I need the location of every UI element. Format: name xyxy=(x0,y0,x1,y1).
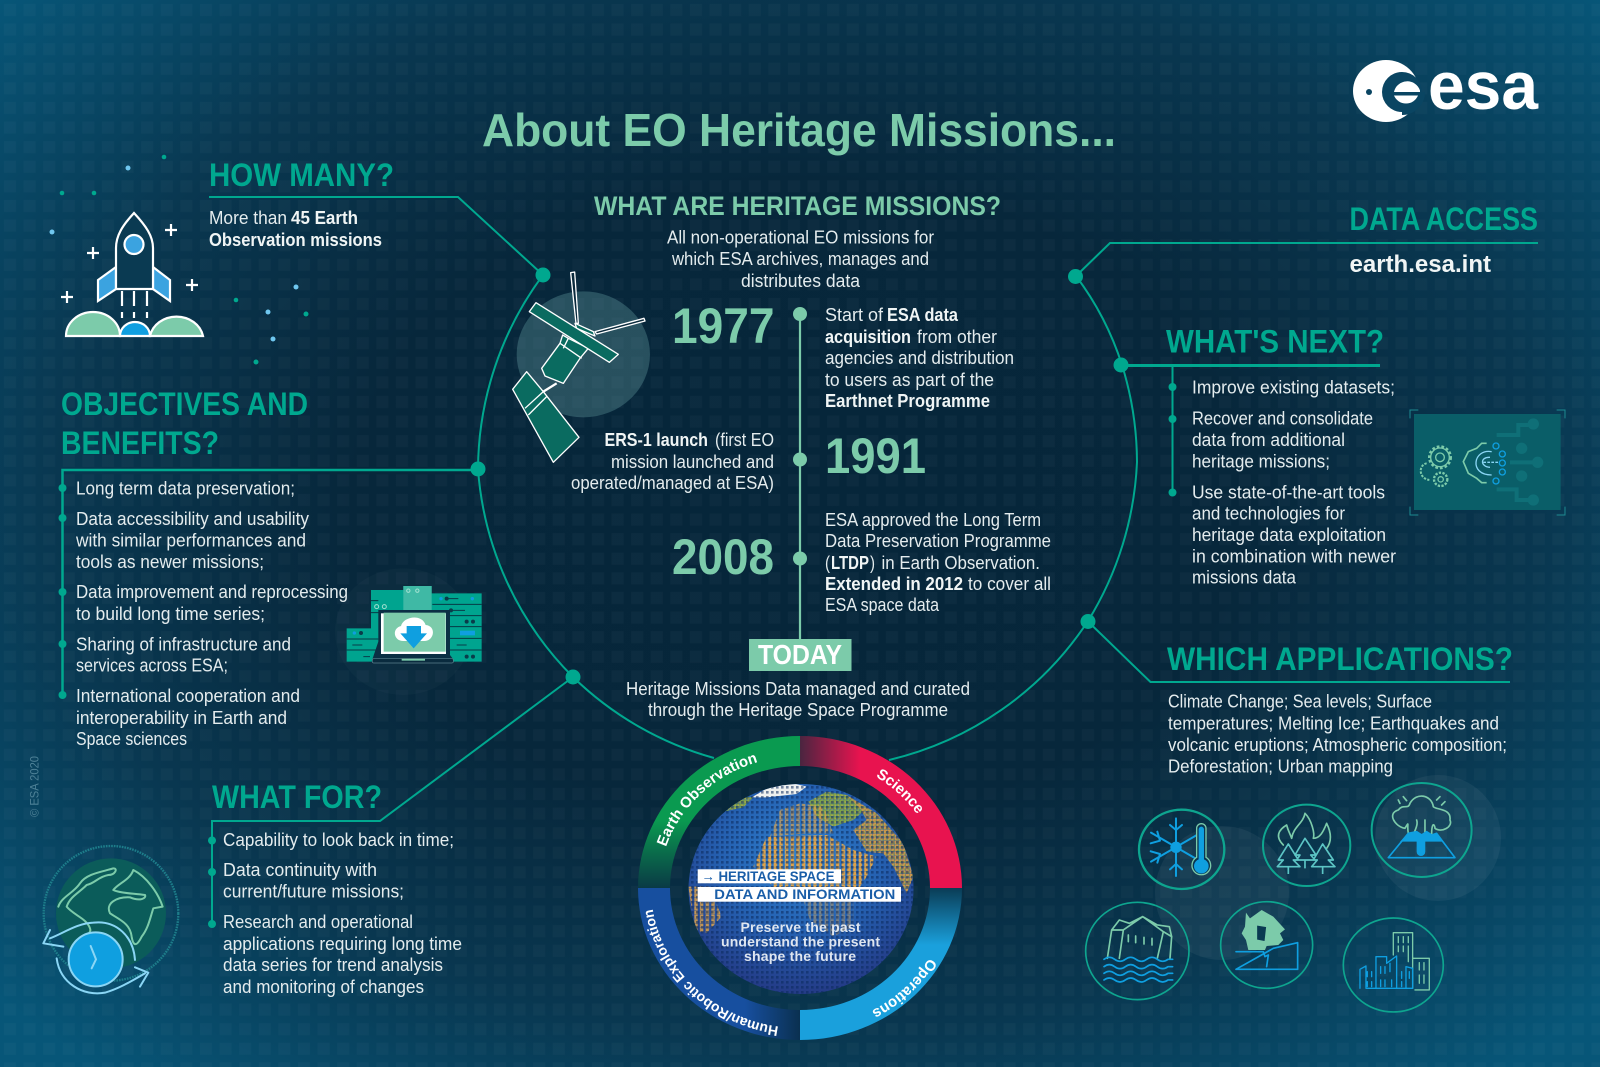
esa logo: esa xyxy=(1428,48,1539,124)
text: 1991 event: ESA approved the Long Term xyxy=(825,510,1041,530)
heading: what for: WHAT FOR? xyxy=(212,779,382,815)
text: what for list: Data continuity with xyxy=(223,860,377,880)
text: definition: which ESA archives, manages and xyxy=(671,249,929,269)
text: applications: temperatures; Melting Ice; Earthquakes and xyxy=(1168,714,1499,734)
timeline nodes xyxy=(793,307,807,566)
label: science: Science xyxy=(877,769,922,813)
icon: servers and laptop xyxy=(335,568,482,695)
icon: earthquake xyxy=(1221,902,1313,988)
text: what for list: current/future missions; xyxy=(223,882,404,902)
text: objectives list: with similar performances and xyxy=(75,530,306,550)
year: 1991: 1991 xyxy=(825,428,926,484)
text: applications: Climate Change; Sea levels; Surface xyxy=(1168,692,1432,712)
text: what for list: applications requiring long time xyxy=(223,934,462,954)
connector: objectives xyxy=(62,470,478,695)
text: 1991 event: in Earth Observation. xyxy=(882,553,1040,573)
bullets: what for xyxy=(208,836,216,928)
panel: which applications xyxy=(1080,614,1513,776)
connector: which applications xyxy=(1088,622,1510,682)
icon: ERS-1 satellite xyxy=(513,272,650,462)
text: what for list: Capability to look back in time; xyxy=(223,830,454,850)
text: how many xyxy=(209,208,382,250)
text: objectives list: services across ESA; xyxy=(76,656,228,676)
text: preserve understand shape xyxy=(721,919,880,964)
heading: objectives xyxy=(61,386,308,461)
node: how many xyxy=(536,268,550,282)
text: objectives list: interoperability in Earth and xyxy=(76,708,287,728)
label: earth observation: Earth Observation xyxy=(656,755,758,846)
heading: how many: HOW MANY? xyxy=(209,157,394,193)
icon: flood xyxy=(1086,902,1189,1000)
segment: human robotic exploration xyxy=(638,888,800,1040)
text: objectives list: Sharing of infrastructure and xyxy=(76,634,291,654)
text: preserve understand shape: shape the future xyxy=(744,948,856,964)
text: what's next list: and technologies for xyxy=(1192,504,1345,524)
title: About EO Heritage Missions... xyxy=(482,104,1116,156)
text: what for list xyxy=(223,830,462,997)
text: what's next list: heritage data exploitation xyxy=(1192,525,1386,545)
esa logo xyxy=(1353,48,1539,124)
connector: how many xyxy=(209,197,543,275)
connector: data access xyxy=(1076,243,1538,276)
text: applications: Deforestation; Urban mapping xyxy=(1168,756,1393,776)
text: 1991 event: Extended in 2012 xyxy=(825,574,963,594)
decorative stars around rocket xyxy=(50,155,308,364)
label: heritage space data and information: → HERITAGE SPACE xyxy=(702,868,834,884)
text: 1991 event xyxy=(825,510,1051,615)
text: what for list: and monitoring of changes xyxy=(223,977,424,997)
text: objectives list xyxy=(75,478,348,749)
icon: rocket xyxy=(61,213,203,336)
label: heritage space data and information: DATA AND INFORMATION xyxy=(714,886,895,902)
panel: what's next xyxy=(1114,324,1396,588)
label: human robotic exploration: Human/Robotic Exploration xyxy=(646,910,778,1036)
year: 2008: 2008 xyxy=(672,529,774,585)
text: applications: volcanic eruptions; Atmospheric composition; xyxy=(1168,735,1507,755)
text: preserve understand shape: understand the present xyxy=(721,934,880,950)
text: today xyxy=(626,679,970,720)
year: 1977: 1977 xyxy=(672,298,774,354)
text: ERS-1 launch xyxy=(571,430,774,493)
text: 1977 event: acquisition xyxy=(825,327,911,347)
text: 1991 event: to cover all xyxy=(968,574,1051,594)
connector: what's next xyxy=(1121,364,1380,367)
text: what's next list: missions data xyxy=(1192,568,1297,588)
text: 1991 event: LTDP xyxy=(831,553,869,573)
timeline xyxy=(571,298,1051,720)
panel: what for xyxy=(208,670,580,997)
icon: earth globe xyxy=(688,783,914,994)
text: 1991 event: ) xyxy=(870,553,875,573)
text: 1977 event: Earthnet Programme xyxy=(825,391,990,411)
text: what's next list: heritage missions; xyxy=(1192,452,1330,472)
text: objectives list: Data improvement and reprocessing xyxy=(76,582,348,602)
icon: snowflake and thermometer xyxy=(1139,810,1224,889)
text: what's next list: data from additional xyxy=(1192,430,1345,450)
text: objectives list: Space sciences xyxy=(76,729,187,749)
icon: gears and digital circuit xyxy=(1410,410,1565,515)
label: operations: Operations xyxy=(872,960,936,1017)
text: preserve understand shape: Preserve the past xyxy=(740,919,861,935)
text: today: through the Heritage Space Programme xyxy=(648,700,948,720)
text: what for list: data series for trend analysis xyxy=(223,955,443,975)
node: objectives xyxy=(470,462,486,476)
bullets: objectives xyxy=(58,484,66,699)
icon: globe with clock xyxy=(43,846,178,993)
text: how many: More than xyxy=(209,208,287,228)
text: 1977 event: to users as part of the xyxy=(825,370,994,390)
heading: objectives: OBJECTIVES AND xyxy=(61,386,308,422)
text: definition: All non-operational EO missions for xyxy=(667,228,934,248)
link text: earth.esa.int xyxy=(1350,251,1491,278)
text: what for list: Research and operational xyxy=(223,912,413,932)
text: definition: distributes data xyxy=(741,271,861,291)
text: ERS-1 launch: operated/managed at ESA) xyxy=(571,473,774,493)
node: data access xyxy=(1068,269,1083,284)
copyright note: © ESA 2020 xyxy=(28,756,42,817)
node: what for xyxy=(566,670,580,684)
diagram: four-domain ring xyxy=(638,736,962,1040)
text: how many: 45 Earth xyxy=(291,208,358,228)
text: what's next list: in combination with newer xyxy=(1192,546,1396,566)
text: 1991 event: ESA space data xyxy=(825,595,940,615)
panel: what are heritage missions xyxy=(594,191,1001,291)
text: 1991 event: Data Preservation Programme xyxy=(825,531,1051,551)
icon: forest fire xyxy=(1263,805,1350,886)
segment: earth observation xyxy=(638,736,800,888)
text: applications xyxy=(1168,692,1507,776)
badge: today: TODAY xyxy=(758,639,842,670)
label: heritage space data and information xyxy=(698,868,901,902)
panel: how many xyxy=(209,157,550,282)
text: what's next list: Recover and consolidate xyxy=(1192,408,1373,428)
text: 1977 event: agencies and distribution xyxy=(825,348,1014,368)
text: objectives list: tools as newer missions; xyxy=(76,552,264,572)
text: 1977 event: from other xyxy=(917,327,997,347)
text: how many: Observation missions xyxy=(209,230,382,250)
heading: which applications: WHICH APPLICATIONS? xyxy=(1167,641,1513,677)
text: objectives list: Long term data preservation; xyxy=(76,478,295,498)
text: today: Heritage Missions Data managed and curated xyxy=(626,679,970,699)
node: which applications xyxy=(1080,614,1096,629)
segment: science xyxy=(800,736,962,888)
text: ERS-1 launch: mission launched and xyxy=(611,452,774,472)
text: 1977 event: ESA data xyxy=(887,305,959,325)
text: objectives list: Data accessibility and usability xyxy=(76,509,309,529)
icon: volcano xyxy=(1372,783,1472,877)
text: 1977 event: Start of xyxy=(825,305,884,325)
text: definition xyxy=(667,228,934,291)
text: ERS-1 launch: ERS-1 launch xyxy=(604,430,708,450)
panel: objectives and benefits xyxy=(58,386,486,749)
heading: objectives: BENEFITS? xyxy=(61,425,219,461)
timeline axis xyxy=(799,314,801,640)
text: 1977 event xyxy=(825,305,1014,411)
text: what's next list: Improve existing datasets; xyxy=(1192,378,1395,398)
connector: what for xyxy=(212,677,573,924)
heading: what's next: WHAT'S NEXT? xyxy=(1166,324,1384,360)
heading: data access: DATA ACCESS xyxy=(1350,201,1538,237)
text: ERS-1 launch: (first EO xyxy=(715,430,774,450)
segment: operations xyxy=(800,888,962,1040)
central ring arc xyxy=(478,275,1137,760)
text: what's next list xyxy=(1192,378,1396,588)
heading: what are heritage missions: WHAT ARE HERITAGE MISSIONS? xyxy=(594,191,1001,221)
text: objectives list: International cooperation and xyxy=(76,686,300,706)
bullets: what's next xyxy=(1168,383,1176,496)
node: what's next xyxy=(1114,358,1128,372)
text: what's next list: Use state-of-the-art tools xyxy=(1192,482,1385,502)
icon: city xyxy=(1343,918,1443,1012)
text: 1991 event: ( xyxy=(825,553,830,573)
panel: data access xyxy=(1068,201,1538,284)
text: objectives list: to build long time series; xyxy=(76,604,265,624)
icon: applications backdrop circles xyxy=(1155,775,1501,960)
